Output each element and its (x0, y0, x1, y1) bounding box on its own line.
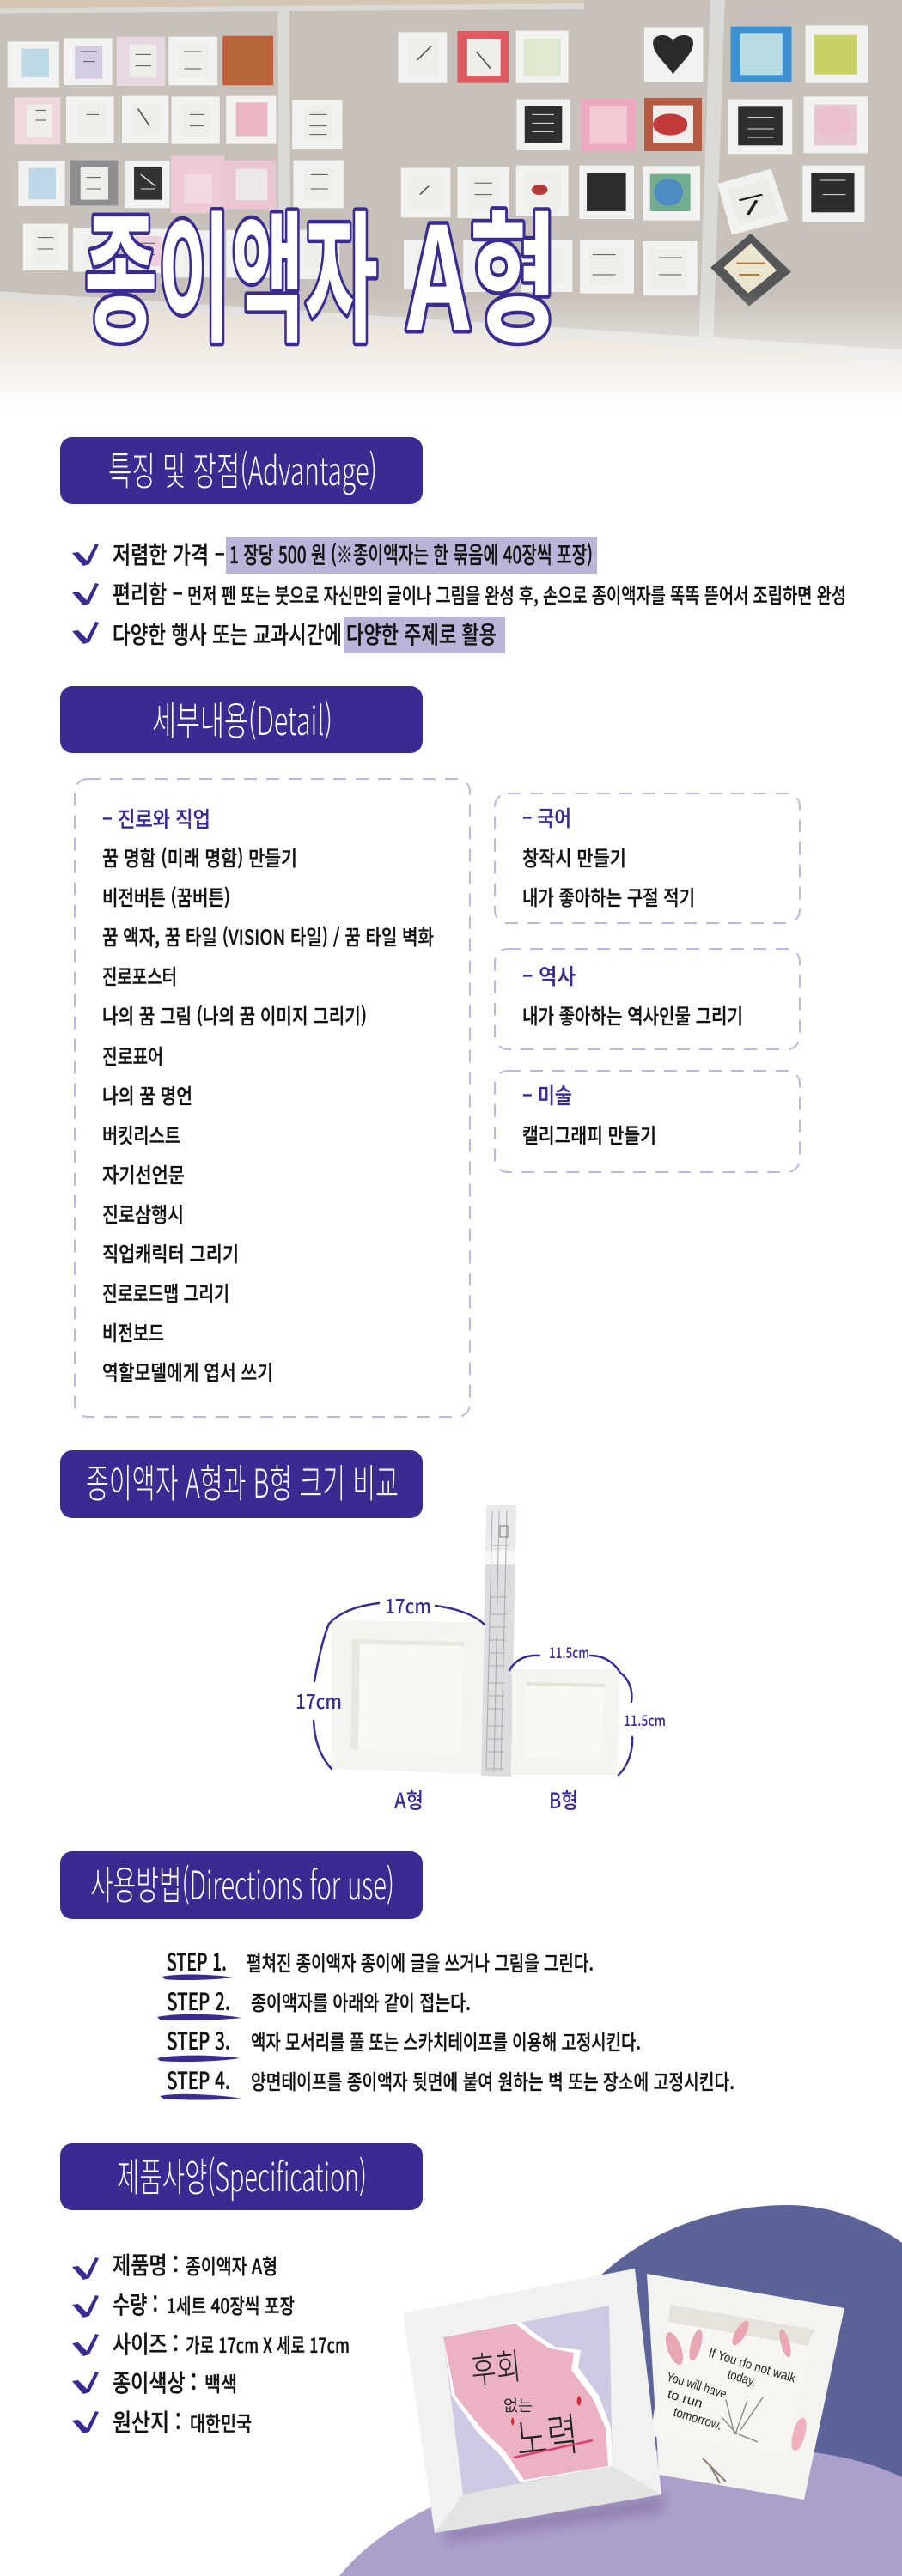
spec: product name: 종이액자 A형 (186, 2250, 277, 2280)
career activity list (102, 841, 434, 1386)
back frame with English message: today, (726, 2367, 758, 2390)
heading badge: advantage: 특징 및 장점(Advantage) (108, 440, 377, 497)
heading badge: specification (60, 2143, 423, 2210)
title: 종이액자 (84, 166, 378, 371)
back frame with English message (647, 2274, 844, 2500)
spec: quantity: 수량 : (113, 2287, 158, 2321)
step 2 (157, 1984, 471, 2020)
career activity list: 나의 꿈 그림 (나의 꿈 이미지 그리기) (102, 999, 367, 1030)
panel: art: – 미술 (522, 1079, 572, 1110)
panel: korean (495, 793, 800, 923)
career activity list: 꿈 명함 (미래 명함) 만들기 (102, 841, 297, 872)
front frame with pink message (403, 2269, 661, 2533)
dimension labels: 11.5cm (624, 1709, 666, 1730)
panel: history (495, 949, 800, 1049)
spec: origin: 대한민국 (190, 2407, 252, 2437)
step 2: 종이액자를 아래와 같이 접는다. (251, 1986, 471, 2016)
front frame with pink message: 후회 (468, 2337, 523, 2395)
type labels (394, 1784, 578, 1815)
career activity list: 진로삼행시 (102, 1198, 184, 1228)
panel: korean: 내가 좋아하는 구절 적기 (522, 881, 695, 911)
heading badge: directions: 사용방법(Directions for use) (90, 1855, 394, 1911)
panel: korean: 창작시 만들기 (522, 841, 626, 872)
heading badge: detail (60, 686, 423, 753)
panel heading: career: – 진로와 직업 (102, 803, 210, 834)
title: A형 (406, 166, 558, 371)
heading badge: detail: 세부내용(Detail) (152, 690, 332, 747)
spec: paper colour: 백색 (204, 2367, 237, 2397)
spec: size (72, 2326, 350, 2360)
dimension labels (296, 1590, 666, 1730)
spec: size: 사이즈 : (113, 2326, 179, 2360)
dimension labels: 17cm (385, 1590, 431, 1619)
career activity list: 자기선언문 (102, 1158, 185, 1188)
decorative background blobs (339, 2205, 902, 2576)
item: convenience: 편리함 – (113, 576, 183, 611)
back frame with English message: tomorrow. (672, 2405, 723, 2433)
type labels: B형 (549, 1784, 578, 1815)
panel: history: – 역사 (522, 960, 576, 991)
back frame with English message: You will have (665, 2370, 728, 2402)
career activity list: 직업캐릭터 그리기 (102, 1237, 239, 1267)
steps list (157, 1944, 734, 2100)
item: low price: 저렴한 가격 – (113, 537, 225, 571)
frame B (512, 1669, 619, 1775)
back frame with English message: If You do not walk (707, 2346, 798, 2386)
spec: paper colour: 종이색상 : (113, 2365, 197, 2399)
size comparison photo (296, 1505, 666, 1815)
step 3 (157, 2023, 641, 2062)
front frame with pink message: 노력 (513, 2398, 581, 2469)
spec: paper colour (72, 2365, 237, 2399)
step 1 (162, 1944, 594, 1980)
panel: art (495, 1071, 800, 1172)
step 1: STEP 1. (167, 1944, 227, 1978)
spec: product name: 제품명 : (113, 2247, 179, 2281)
spec: size: 가로 17cm X 세로 17cm (186, 2329, 350, 2359)
dimension labels: 17cm (296, 1686, 342, 1715)
step 4: 양면테이프를 종이액자 뒷면에 붙여 원하는 벽 또는 장소에 고정시킨다. (251, 2065, 734, 2095)
item: low price (72, 537, 597, 574)
heading badge: advantage (60, 437, 423, 504)
career activity list: 진로포스터 (102, 960, 177, 990)
heading badge: size comparison: 종이액자 A형과 B형 크기 비교 (86, 1453, 399, 1510)
step 4 (160, 2063, 734, 2100)
item: various events: 다양한 주제로 활용 (346, 617, 497, 651)
step 3: 액자 모서리를 풀 또는 스카치테이프를 이용해 고정시킨다. (251, 2026, 641, 2056)
step 4: STEP 4. (167, 2063, 230, 2097)
advantage list (72, 537, 846, 653)
frame A (331, 1620, 485, 1774)
item: low price: 1 장당 500 원 (※종이액자는 한 묶음에 40장씩 포장) (229, 537, 593, 570)
product photo (403, 2269, 844, 2542)
item: various events: 다양한 행사 또는 교과시간에 (113, 617, 342, 651)
panel: career and jobs (75, 779, 470, 1417)
spec: origin (72, 2404, 252, 2439)
heading badge: specification: 제품사양(Specification) (117, 2147, 367, 2203)
item: various events (72, 617, 505, 653)
ruler (481, 1505, 516, 1777)
heading badge: size comparison (60, 1450, 423, 1518)
step 2: STEP 2. (167, 1984, 230, 2018)
panel: korean: – 국어 (522, 802, 571, 833)
front frame shadow (447, 2494, 666, 2542)
panel: art: 캘리그래피 만들기 (522, 1119, 656, 1149)
dimension arcs (314, 1603, 632, 1775)
spec: product name (72, 2247, 277, 2281)
career activity list: 역할모델에게 엽서 쓰기 (102, 1356, 273, 1386)
spec: quantity (72, 2287, 295, 2321)
hero photo: wall of paper frames (0, 0, 902, 412)
back frame with English message: to run (666, 2387, 704, 2411)
career activity list: 나의 꿈 명언 (102, 1079, 192, 1109)
type labels: A형 (394, 1784, 424, 1815)
heading badge: directions (60, 1851, 423, 1919)
career activity list: 버킷리스트 (102, 1119, 180, 1149)
panel: history: 내가 좋아하는 역사인물 그리기 (522, 999, 743, 1030)
spec list (72, 2247, 350, 2439)
front frame with pink message: 없는 (503, 2394, 533, 2416)
career activity list: 비전보드 (102, 1316, 164, 1346)
career activity list: 진로로드맵 그리기 (102, 1277, 229, 1307)
step 3: STEP 3. (167, 2023, 230, 2057)
step 1: 펼쳐진 종이액자 종이에 글을 쓰거나 그림을 그린다. (247, 1947, 594, 1977)
dimension labels: 11.5cm (549, 1641, 589, 1662)
career activity list: 진로표어 (102, 1040, 163, 1070)
career activity list: 꿈 액자, 꿈 타일 (VISION 타일) / 꿈 타일 벽화 (102, 920, 434, 951)
spec: quantity: 1세트 40장씩 포장 (167, 2289, 295, 2319)
career activity list: 비전버튼 (꿈버튼) (102, 881, 230, 911)
spec: origin: 원산지 : (113, 2404, 181, 2439)
